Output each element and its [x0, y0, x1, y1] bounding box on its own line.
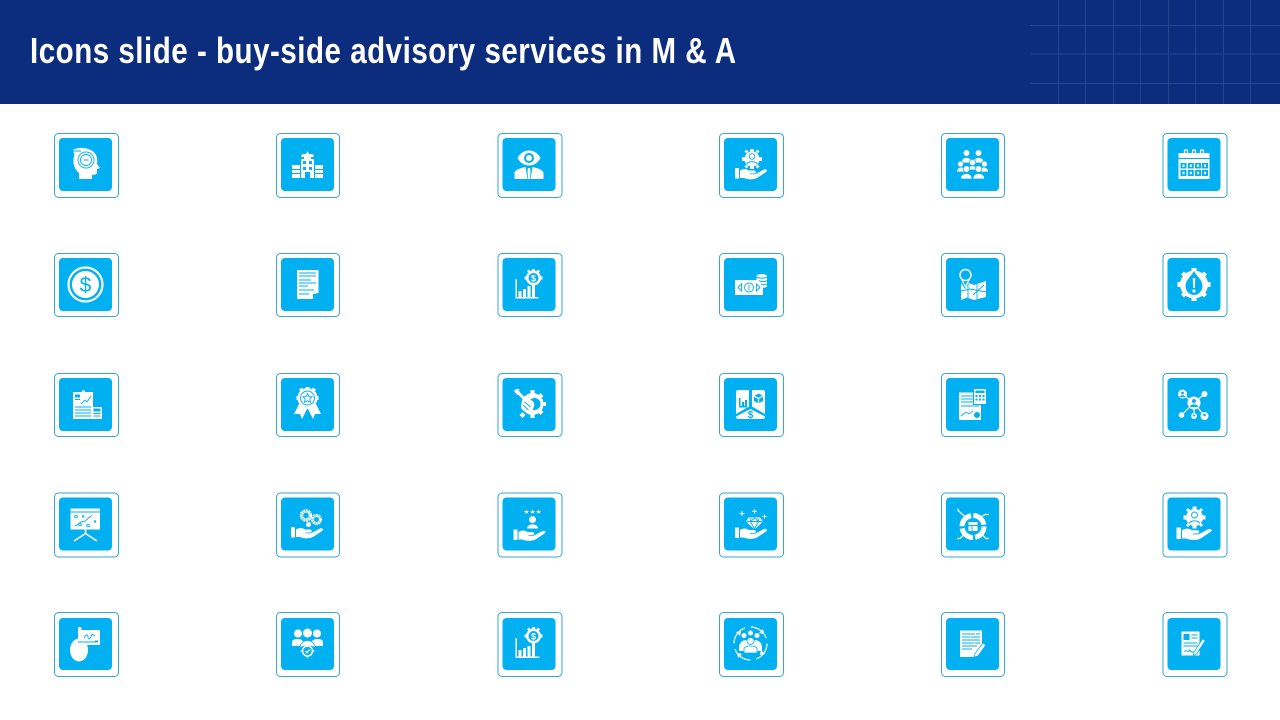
icon: people: [956, 150, 988, 179]
tile: team with target: [276, 612, 340, 676]
header banner: [0, 0, 1280, 104]
tile: hand pointing at chart card: [54, 612, 118, 676]
icon: document calculator: [959, 388, 987, 420]
icon: team with circular arrows: [734, 627, 767, 660]
icon: chart and gear: $: [531, 632, 536, 642]
icon: warning gear: [1178, 268, 1210, 301]
tile: form with pen: [1163, 612, 1227, 676]
tile: chart with dollar gear: [498, 612, 562, 676]
tile: document with pen: [942, 612, 1004, 676]
tile: gear person in hand: [720, 134, 784, 198]
tile: invoice and calculator: [942, 374, 1004, 436]
icon: text document and pen: [960, 630, 986, 657]
icon: dollar coin: $: [80, 274, 92, 297]
tile: diamond on hand: [720, 493, 784, 557]
icon: hand with gears: [291, 511, 323, 538]
tile: eye on businessman: [498, 134, 562, 198]
tile: split square with dollar: [720, 374, 784, 436]
icon: document: [297, 270, 318, 299]
tile: person on hand with stars: [498, 493, 562, 557]
icon: hand holding gear: [735, 149, 767, 179]
icon: form and signature pen: [1182, 632, 1206, 656]
tile: calendar: [1163, 134, 1227, 198]
icon: presentation board: [70, 508, 100, 541]
icon: calendar: [1178, 150, 1210, 179]
tile: larger gear person in hand: [1163, 493, 1227, 557]
tile: office building: [276, 134, 340, 198]
icon: head: [73, 148, 100, 179]
icon: hand with person: [514, 510, 545, 541]
icon: hand holding card: [70, 627, 100, 662]
icon: rosette: [294, 387, 321, 419]
tile: map with pin: [942, 254, 1004, 316]
icon: money: [735, 274, 767, 295]
icon: hand with diamond: [735, 509, 767, 539]
tile: gears on hand: [276, 493, 340, 557]
icon: network: [1178, 390, 1208, 420]
tile: dollar coin: [54, 254, 118, 316]
icon: three-part card: $: [748, 410, 754, 421]
tile: wrench and gear: [498, 374, 562, 436]
tile: group of people: [942, 134, 1004, 198]
icon: team and target: [292, 628, 323, 658]
tile: document: [276, 254, 340, 316]
tile: chart with dollar gear: [498, 254, 562, 316]
icon: report with calculator: [73, 390, 102, 419]
tile: clipboard and calculator: [54, 374, 118, 436]
tile: gear with warning: [1163, 254, 1227, 316]
title: Icons slide - buy-side advisory services in M & A: [30, 30, 736, 71]
tile: people network: [1163, 374, 1227, 436]
tile: head with brain target: [54, 134, 118, 198]
icon: eye and suit: [514, 150, 544, 179]
icon: hand holding gear: [1176, 506, 1212, 540]
icon: segmented donut: [957, 508, 989, 538]
tile: people cycle: [720, 612, 784, 676]
tile: segmented ring with store: [942, 493, 1004, 557]
tile: award ribbon: [276, 374, 340, 436]
icon: map pin: [960, 270, 986, 300]
icon: chart and gear: $: [531, 274, 536, 284]
tile: strategy board: [54, 493, 118, 557]
icon: wrench in gear: [514, 389, 546, 418]
tile: banknote and coins: [720, 254, 784, 316]
icon: building: [292, 151, 323, 178]
